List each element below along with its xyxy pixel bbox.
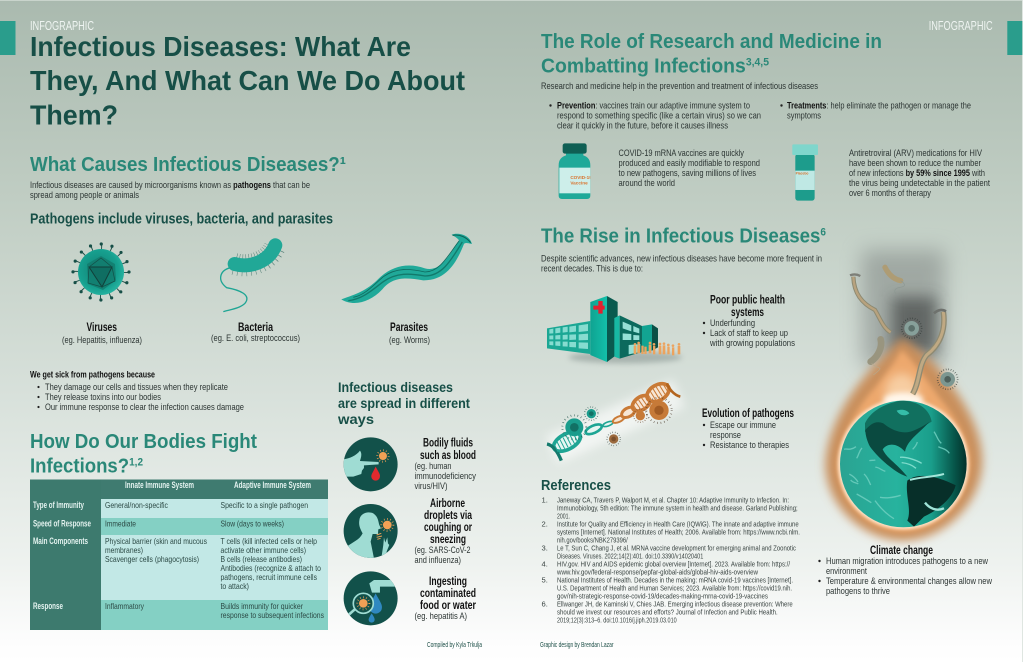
table: innate vs adaptive immune system: to attack) bbox=[220, 581, 249, 591]
text: climate change: environment bbox=[826, 565, 867, 576]
text block: contaminated food or water: (eg. hepatitis A) bbox=[414, 610, 467, 621]
text block: bodily fluids bbox=[414, 438, 476, 491]
text: climate change: Climate change bbox=[870, 545, 933, 557]
icon: hospital bbox=[547, 296, 682, 363]
text: poor public health systems bbox=[703, 294, 795, 348]
reference list: Le T, Sun C, Chang J, et al. MRNA vaccine development for emerging animal and Zoonotic bbox=[557, 544, 796, 553]
icon: parasite worm bbox=[341, 234, 472, 303]
table: innate vs adaptive immune system: Main Components bbox=[33, 536, 88, 546]
text: ARV medications: have been shown to reduce the number bbox=[849, 157, 981, 168]
text block: contaminated food or water: contaminated bbox=[420, 588, 476, 600]
table: innate vs adaptive immune system bbox=[30, 480, 328, 630]
text: poor public health systems: Underfunding bbox=[710, 317, 755, 328]
text block: why pathogens make us sick: Our immune response to clear the infection causes damage bbox=[45, 401, 244, 412]
icon: bodily fluids bbox=[343, 437, 398, 491]
heading: how do our bodies fight infections: 1,2 bbox=[129, 456, 143, 468]
left page kicker: INFOGRAPHIC: INFOGRAPHIC bbox=[30, 19, 94, 33]
heading: role of research and medicine: Combatting Infections bbox=[541, 54, 757, 78]
main title: They, And What Can We Do About bbox=[30, 65, 465, 96]
icon: airborne droplets bbox=[343, 504, 398, 558]
text: evolution of pathogens: Evolution of pathogens bbox=[702, 408, 794, 420]
text block: airborne droplets: Airborne bbox=[430, 498, 465, 510]
main title: Infectious Diseases: What Are bbox=[30, 31, 411, 62]
reference list: 3. bbox=[542, 544, 548, 553]
reference list: 2001. bbox=[557, 512, 570, 521]
icon: contaminated water bbox=[344, 571, 400, 625]
heading: how infections spread: are spread in different bbox=[338, 395, 470, 411]
text block: airborne droplets: droplets via bbox=[424, 510, 472, 522]
icon: vaccine vial: Vaccine bbox=[570, 181, 588, 186]
text block: airborne droplets: coughing or bbox=[424, 522, 472, 534]
bullet: prevention: clear it quickly in the future, before it causes illness bbox=[557, 120, 728, 130]
text block: airborne droplets: (eg. SARS-CoV-2 bbox=[414, 544, 470, 555]
icon: vaccine vial: COVID-19 bbox=[570, 175, 592, 180]
caption: viruses: (eg. Hepatitis, influenza) bbox=[62, 334, 142, 345]
table: innate vs adaptive immune system: Adaptive Immune System bbox=[234, 480, 311, 490]
text: evolution of pathogens: response bbox=[710, 429, 741, 440]
reference list: systems [Internet]. National Institutes of Health; 2006. Available from: https://www.ncbi.nlm. bbox=[557, 528, 800, 537]
table: innate vs adaptive immune system: membranes) bbox=[105, 545, 143, 555]
text: climate change: pathogens to thrive bbox=[826, 585, 890, 596]
icon: antiretroviral medication bottle bbox=[792, 144, 818, 201]
table: innate vs adaptive immune system: Specific to a single pathogen bbox=[220, 500, 308, 510]
heading: references: References bbox=[541, 477, 611, 494]
icon: antiretroviral medication bottle: Placebo bbox=[796, 172, 808, 176]
table: innate vs adaptive immune system: Antibodies (recognize & attach to bbox=[220, 563, 321, 573]
text: poor public health systems: with growing populations bbox=[709, 337, 795, 348]
text: rise intro: Despite scientific advances, new infectious diseases have become more frequent in bbox=[541, 253, 822, 264]
text block: why pathogens make us sick: They damage our cells and tissues when they replicate bbox=[45, 381, 228, 392]
main title bbox=[30, 31, 465, 130]
globe bbox=[840, 401, 967, 527]
table: innate vs adaptive immune system: activate other immune cells) bbox=[220, 545, 306, 555]
table: innate vs adaptive immune system: Scavenger cells (phagocytosis) bbox=[105, 554, 199, 564]
heading: how infections spread bbox=[337, 379, 470, 427]
table: innate vs adaptive immune system: General/non-specific bbox=[105, 500, 169, 510]
table: innate vs adaptive immune system: pathogens, recruit immune cells bbox=[220, 572, 317, 582]
text: ARV medications: over 6 months of therapy bbox=[849, 187, 931, 198]
heading: rise in infectious diseases: The Rise in Infectious Diseases bbox=[541, 225, 847, 248]
table: innate vs adaptive immune system: Builds immunity for quicker bbox=[220, 601, 303, 611]
bullet: treatments: symptoms bbox=[787, 110, 821, 120]
text: ARV medications: of new infections by 59% since 1995 with bbox=[849, 167, 985, 178]
left page marker tab bbox=[0, 21, 16, 55]
text block: airborne droplets bbox=[414, 498, 472, 565]
caption: bacteria: (eg. E. coli, streptococcus) bbox=[211, 332, 300, 343]
text block: pathogens definition: Infectious diseases are caused by microorganisms known as pathogens that can be bbox=[30, 179, 310, 190]
text block: airborne droplets: and influenza) bbox=[414, 554, 461, 565]
text: rise intro bbox=[541, 253, 822, 274]
icon: vaccine vial bbox=[559, 143, 592, 199]
text: evolution of pathogens bbox=[702, 408, 794, 450]
main title: Them? bbox=[30, 100, 118, 130]
caption: parasites: Parasites bbox=[390, 322, 428, 334]
text block: bodily fluids: immunodeficiency bbox=[414, 470, 476, 481]
reference list: 2. bbox=[542, 520, 548, 529]
bullet: prevention bbox=[549, 99, 761, 130]
heading: how do our bodies fight infections: How Do Our Bodies Fight bbox=[30, 430, 257, 453]
reference list: Institute for Quality and Efficiency in Health Care (IQWiG). The innate and adaptive immune bbox=[557, 520, 799, 529]
text: poor public health systems: Poor public health bbox=[710, 294, 785, 306]
text block: why pathogens make us sick: They release toxins into our bodies bbox=[45, 391, 161, 402]
reference list: National Institutes of Health. Decades in the making: mRNA covid-19 vaccines [Internet]. bbox=[557, 576, 793, 585]
reference list: should we invest our resources and efforts? Journal of Infection and Public Health. bbox=[557, 608, 778, 617]
icon: virus bbox=[73, 244, 129, 300]
icon: bacterium bbox=[221, 245, 275, 312]
text block: bodily fluids: (eg. human bbox=[414, 460, 452, 471]
reference list bbox=[542, 496, 800, 625]
reference list: 6. bbox=[542, 600, 548, 609]
text: ARV medications bbox=[849, 147, 990, 198]
table: innate vs adaptive immune system: Type of Immunity bbox=[33, 500, 84, 510]
caption: viruses: Viruses bbox=[86, 322, 117, 334]
icon: DNA and mutating pathogens bbox=[547, 380, 680, 461]
heading: how do our bodies fight infections: Infections? bbox=[30, 454, 139, 478]
heading: how do our bodies fight infections bbox=[30, 430, 257, 478]
heading: rise in infectious diseases: 6 bbox=[820, 227, 826, 239]
reference list: 5. bbox=[542, 576, 548, 585]
right page kicker: INFOGRAPHIC: INFOGRAPHIC bbox=[929, 19, 993, 33]
text: poor public health systems: Lack of staff to keep up bbox=[710, 327, 788, 338]
reference list: 4. bbox=[542, 560, 548, 569]
right page marker tab bbox=[1007, 21, 1022, 55]
table: innate vs adaptive immune system: Physical barrier (skin and mucous bbox=[105, 536, 207, 546]
bullet: prevention: Prevention: vaccines train our adaptive immune system to bbox=[557, 99, 750, 110]
caption: parasites: (eg. Worms) bbox=[389, 334, 430, 345]
reference list: Diseases. Viruses. 2022;14(2):401. doi:10.3390/v14020401 bbox=[557, 552, 703, 561]
reference list: HIV.gov. HIV and AIDS epidemic global overview [Internet]. 2023. Available from: https:// bbox=[557, 560, 791, 569]
heading: What Causes Infectious Diseases: What Causes Infectious Diseases?¹ bbox=[30, 154, 346, 176]
text block: bodily fluids: virus/HIV) bbox=[414, 480, 448, 491]
table: innate vs adaptive immune system: Innate Immune System bbox=[125, 480, 194, 490]
text block: bodily fluids: such as blood bbox=[420, 450, 476, 462]
reference list: 1. bbox=[542, 496, 548, 505]
illustration: burning Earth with smoke and pathogens bbox=[825, 250, 982, 541]
text: climate change: Human migration introduces pathogens to a new bbox=[826, 555, 988, 566]
text block: contaminated food or water: Ingesting bbox=[429, 576, 467, 588]
table: innate vs adaptive immune system: T cells (kill infected cells or help bbox=[220, 536, 317, 546]
reference list: Immunobiology, 5th edition: The immune system in health and disease. Garland Publishing; bbox=[557, 504, 798, 513]
table: innate vs adaptive immune system: Slow (days to weeks) bbox=[220, 518, 284, 528]
bullet: prevention: respond to something specific (like a certain virus) so we can bbox=[557, 110, 761, 120]
text block: pathogens definition bbox=[30, 179, 310, 200]
reference list: gov/nih-strategic-response-covid-19/decades-making-mrna-covid-19-vaccines bbox=[557, 592, 768, 601]
credit: graphic design: Graphic design by Brendan Lazar bbox=[540, 640, 614, 649]
reference list: www.hiv.gov/federal-response/pepfar-global-aids/global-hiv-aids-overview bbox=[556, 568, 758, 577]
bullet: treatments: Treatments: help eliminate the pathogen or manage the bbox=[787, 99, 971, 110]
text: ARV medications: the virus being undetectable in the patient bbox=[849, 177, 990, 188]
text block: why pathogens make us sick bbox=[30, 368, 244, 412]
table: innate vs adaptive immune system: Speed of Response bbox=[33, 518, 91, 528]
text block: contaminated food or water bbox=[414, 576, 476, 621]
heading: role of research and medicine: 3,4,5 bbox=[746, 56, 769, 68]
table: innate vs adaptive immune system: Response bbox=[33, 601, 63, 611]
caption: bacteria bbox=[211, 322, 300, 343]
table: innate vs adaptive immune system: response to subsequent infections bbox=[220, 610, 324, 620]
caption: viruses bbox=[62, 322, 142, 345]
text: ARV medications: Antiretroviral (ARV) medications for HIV bbox=[849, 147, 983, 158]
text: COVID-19 vaccines: COVID-19 mRNA vaccines are quickly bbox=[618, 147, 744, 158]
text: research intro: Research and medicine help in the prevention and treatment of infectious diseases bbox=[541, 80, 818, 91]
heading: how infections spread: Infectious diseases bbox=[338, 379, 453, 395]
table: innate vs adaptive immune system: Immediate bbox=[105, 518, 136, 528]
bullet: treatments bbox=[780, 99, 971, 120]
reference list: 2019;12(3):313–6. doi:10.1016/j.jiph.2019.03.010 bbox=[557, 616, 677, 625]
subheading: pathogens include: Pathogens include viruses, bacteria, and parasites bbox=[30, 212, 333, 228]
text block: contaminated food or water: food or water bbox=[420, 600, 476, 612]
text: poor public health systems: systems bbox=[731, 307, 764, 319]
reference list: nih.gov/books/NBK279396/ bbox=[557, 536, 628, 545]
caption: parasites bbox=[389, 322, 430, 345]
text: evolution of pathogens: Escape our immune bbox=[710, 419, 776, 430]
table: innate vs adaptive immune system: Inflammatory bbox=[105, 601, 145, 611]
reference list: Janeway CA, Travers P, Walport M, et al. Chapter 10: Adaptive Immunity to Infection. In: bbox=[557, 496, 789, 505]
heading: how infections spread: ways bbox=[337, 411, 374, 427]
text block: bodily fluids: Bodily fluids bbox=[423, 438, 473, 450]
text block: airborne droplets: sneezing bbox=[430, 534, 466, 546]
caption: bacteria: Bacteria bbox=[238, 322, 273, 334]
text: rise intro: recent decades. This is due to: bbox=[541, 263, 643, 274]
heading: role of research and medicine bbox=[541, 30, 882, 78]
heading: role of research and medicine: The Role of Research and Medicine in bbox=[541, 30, 882, 53]
text block: why pathogens make us sick: We get sick from pathogens because bbox=[30, 368, 155, 379]
text: COVID-19 vaccines: around the world bbox=[618, 177, 675, 188]
text: COVID-19 vaccines bbox=[618, 147, 760, 188]
reference list: U.S. Department of Health and Human Services; 2023. Available from: https://covid19.nih. bbox=[557, 584, 792, 593]
text: COVID-19 vaccines: produced and easily modifiable to respond bbox=[618, 157, 760, 168]
text: COVID-19 vaccines: to new pathogens, saving millions of lives bbox=[618, 167, 756, 178]
table: innate vs adaptive immune system: B cells (release antibodies) bbox=[220, 554, 302, 564]
text: climate change bbox=[818, 545, 992, 596]
text block: pathogens definition: spread among people or animals bbox=[30, 189, 139, 200]
reference list: Ellwanger JH, de Kaminski V, Chies JAB. Emerging infectious disease prevention: Where bbox=[557, 600, 793, 609]
credit: compiled by: Compiled by Kyla Trkulja bbox=[427, 640, 483, 649]
text: evolution of pathogens: Resistance to therapies bbox=[710, 439, 789, 450]
